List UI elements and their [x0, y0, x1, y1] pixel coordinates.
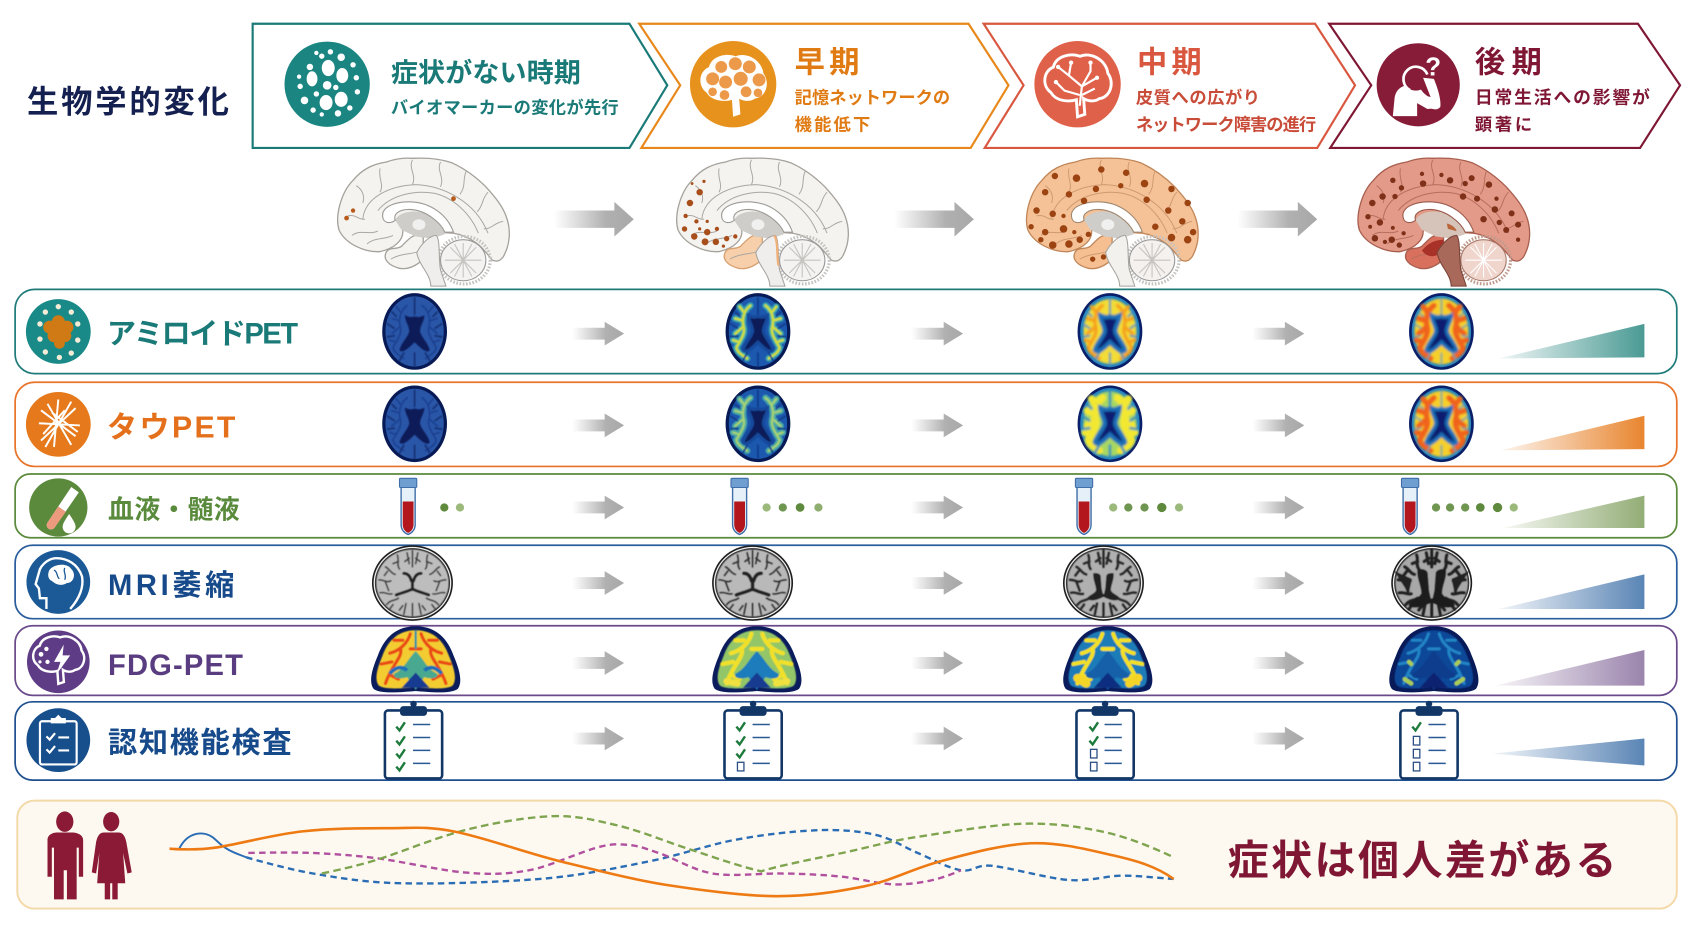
subtitle: バイオマーカーの変化が先行 [391, 97, 619, 117]
label: 血液・髄液 [108, 495, 240, 524]
row: tau PET [15, 382, 1677, 466]
row: MRI atrophy [15, 545, 1677, 621]
label: FDG-PET [108, 650, 243, 682]
icon: test tube and drop [29, 478, 87, 537]
arrows [572, 496, 1304, 519]
brain: middle [1027, 158, 1198, 286]
brain: early [677, 158, 848, 286]
icon: brain with lightning [27, 631, 90, 693]
label: アミロイドPET [107, 318, 298, 350]
title: no symptoms: 症状がない時期 [391, 57, 581, 88]
icon: head with brain [26, 550, 90, 614]
rising level wedge [1499, 574, 1644, 609]
stage header: late: 顕著に [1475, 115, 1532, 135]
icon: clipboard [26, 708, 90, 772]
stage header: no symptoms [253, 24, 667, 148]
level wedge [1492, 739, 1644, 766]
arrows [572, 322, 1304, 346]
clipboard: three checked [724, 701, 782, 778]
heading: biological change: 生物学的変化 [27, 84, 229, 119]
icon: biomarker particles [285, 42, 370, 127]
arrows [572, 651, 1304, 675]
arrow [554, 202, 634, 236]
PET scans [382, 385, 1474, 462]
arrow [1237, 202, 1317, 236]
clipboard: one checked [1400, 701, 1458, 778]
stage header: middle: ネットワーク障害の進行 [1136, 115, 1316, 135]
row: FDG PET [15, 626, 1677, 695]
MRI scans [372, 545, 1472, 621]
row: blood and CSF [15, 474, 1677, 538]
arrow [894, 202, 974, 236]
PET scans [382, 293, 1474, 370]
brain: late [1358, 158, 1530, 286]
description: 皮質への広がり [1136, 88, 1260, 108]
stage header: early: 機能低下 [795, 115, 870, 135]
rising level wedge [1501, 416, 1644, 450]
row: cognitive testing [15, 701, 1677, 780]
stage header: middle [984, 24, 1355, 148]
stage header: early [639, 24, 1008, 148]
description: 記憶ネットワークの [795, 88, 950, 108]
title: early: 早期 [795, 45, 859, 79]
icon: brain network cells [690, 41, 776, 127]
label: 認知機能検査 [108, 727, 292, 760]
biomarker dots [440, 503, 1518, 512]
icon: person with question [1377, 43, 1460, 126]
stage header: late [1329, 24, 1680, 148]
panel: individual differences [17, 801, 1677, 909]
description: 日常生活への影響が [1475, 87, 1650, 108]
label: MRI萎縮 [108, 569, 234, 602]
icon: amyloid plaque [26, 299, 91, 364]
row: amyloid PET [15, 289, 1677, 374]
label: タウPET [107, 410, 236, 444]
icon: brain with network [1034, 41, 1121, 127]
icon: man and woman [48, 811, 132, 899]
declining metabolism wedge [1495, 650, 1644, 686]
text: symptoms differ by individual: 症状は個人差がある [1228, 838, 1616, 884]
title: late: 後期 [1475, 45, 1542, 79]
chart: symptom trajectories [170, 816, 1174, 896]
icon: person with question: ? [1425, 54, 1441, 82]
clipboard: all checked [385, 701, 442, 778]
arrows [572, 571, 1304, 595]
brain: no symptoms [338, 158, 509, 286]
FDG scans [371, 626, 1478, 692]
sample tubes [399, 478, 1419, 534]
arrows [572, 727, 1304, 750]
rising level wedge [1503, 496, 1644, 528]
arrows [572, 414, 1304, 437]
title: middle: 中期 [1137, 45, 1202, 79]
clipboard: two checked [1076, 701, 1134, 778]
rising level wedge [1499, 324, 1644, 358]
icon: tau tangles [26, 392, 91, 457]
